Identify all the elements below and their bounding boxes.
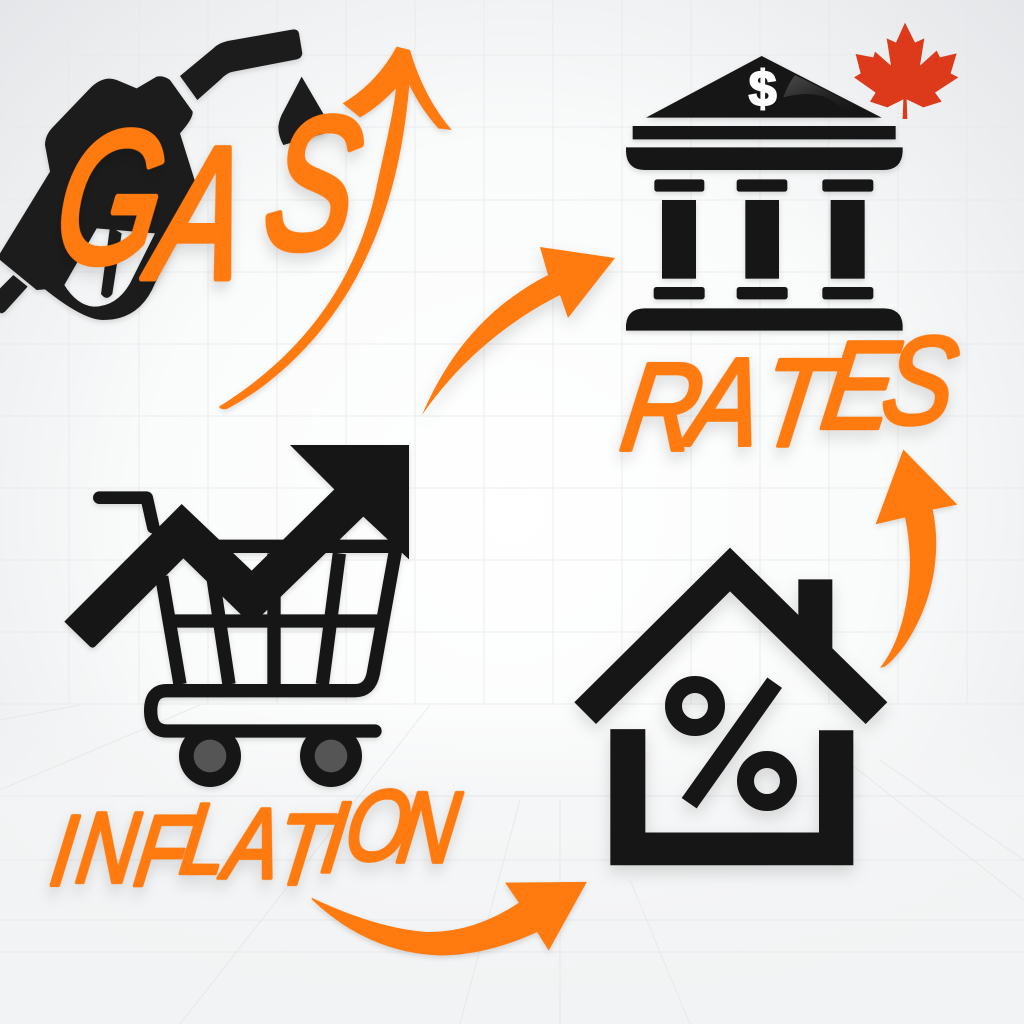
- label: GAS: GAS: [42, 78, 373, 318]
- columns: [662, 200, 865, 279]
- arrow: gas to rates: [422, 247, 615, 415]
- nozzle trigger: [101, 227, 122, 298]
- icon: fuel drop: [278, 77, 327, 145]
- label: INFLATION: INFLATION: [45, 770, 466, 907]
- label: RATES: RATES: [614, 311, 966, 477]
- icon: house with percent sign: [574, 548, 887, 865]
- cart frame: [151, 553, 395, 731]
- nozzle body and trigger guard: [0, 76, 197, 320]
- nozzle hose spout: [180, 29, 302, 100]
- house walls: [610, 729, 853, 865]
- rising arrow: [64, 445, 409, 648]
- roof and chimney: [574, 548, 887, 724]
- column bases: [654, 287, 873, 299]
- cart basket grid: [162, 546, 403, 684]
- icon: gas pump nozzle with fuel drop: [0, 29, 327, 320]
- nozzle tip: [0, 275, 28, 313]
- arrow: house to rates: [876, 450, 957, 668]
- icon: Canadian maple leaf: [854, 23, 958, 119]
- arrow: inflation to house: [312, 882, 587, 956]
- icon: bank with dollar sign: [626, 56, 903, 331]
- dollar sign: $: [749, 61, 777, 117]
- arrow: gas rising: [219, 47, 452, 409]
- roof sheen: [783, 75, 853, 110]
- percent sign: [674, 678, 788, 808]
- icon: shopping cart with rising arrow: [64, 445, 409, 787]
- column capitals: [654, 179, 873, 192]
- cart handle: [99, 498, 153, 527]
- bank roof: [646, 56, 882, 118]
- cornice: [626, 147, 903, 170]
- entablature: [633, 126, 896, 139]
- cart wheels: [179, 725, 362, 787]
- bank foundation: [626, 308, 903, 331]
